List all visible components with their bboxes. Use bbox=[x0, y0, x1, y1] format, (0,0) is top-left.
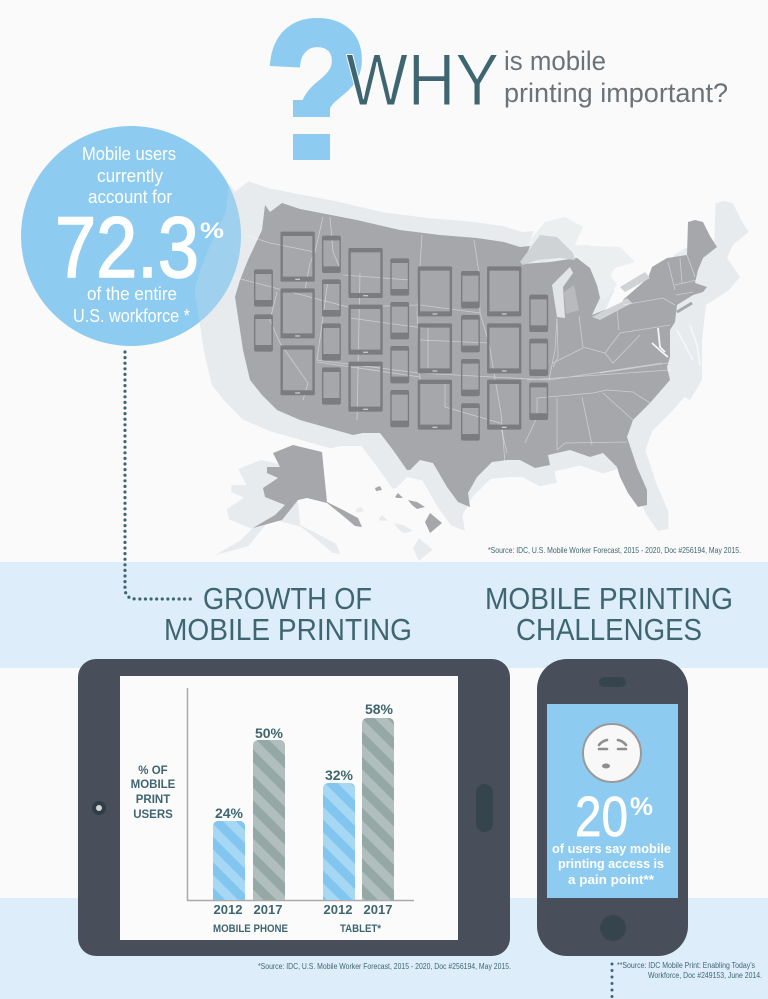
year labels: 2017 bbox=[364, 902, 392, 917]
blue band: section headings bbox=[0, 562, 768, 668]
bar: tablet 2017 bbox=[362, 718, 394, 900]
bar values bbox=[215, 701, 394, 821]
bar values: 50% bbox=[255, 725, 284, 741]
icon: annoyed face bbox=[583, 724, 641, 782]
dotted connector from circle to growth heading bbox=[125, 352, 195, 599]
pain point caption: printing access is bbox=[558, 856, 664, 871]
category labels bbox=[213, 923, 382, 935]
bar values: 32% bbox=[325, 767, 354, 783]
big number: 72.3 bbox=[55, 200, 199, 296]
device column 7 bbox=[461, 271, 480, 441]
subtitle bbox=[504, 46, 728, 108]
map land bbox=[235, 203, 717, 533]
pain point caption bbox=[552, 841, 671, 887]
category labels: TABLET* bbox=[340, 923, 382, 935]
stat text: 72.3%: of the entire bbox=[87, 284, 177, 304]
lake erie bbox=[592, 298, 632, 320]
heading: growth of mobile printing: GROWTH OF bbox=[203, 581, 372, 616]
percent sign: % bbox=[200, 218, 224, 243]
device column 9 bbox=[529, 295, 548, 420]
percent sign: % bbox=[630, 793, 653, 821]
year labels: 2012 bbox=[214, 902, 242, 917]
heading: mobile printing challenges bbox=[485, 581, 733, 647]
heading: mobile printing challenges: MOBILE PRINTING bbox=[485, 581, 733, 616]
state borders bbox=[233, 217, 697, 463]
phone source note bbox=[617, 961, 762, 980]
device column 2 bbox=[280, 232, 315, 395]
y axis label: PRINT bbox=[136, 794, 170, 806]
map halo bbox=[195, 181, 749, 561]
WHY: WHY bbox=[346, 40, 499, 121]
bar values: 58% bbox=[365, 701, 394, 717]
open water gap bbox=[605, 293, 627, 310]
year labels: 2017 bbox=[254, 902, 282, 917]
lake ontario bbox=[620, 272, 650, 292]
tablet home button bbox=[476, 784, 493, 832]
phone screen bbox=[547, 704, 678, 898]
year labels bbox=[214, 902, 392, 917]
phone body bbox=[537, 659, 688, 956]
y axis label: MOBILE bbox=[131, 779, 176, 791]
device column 4 bbox=[348, 248, 383, 412]
map halo showing through the circle bbox=[194, 186, 241, 322]
pain point caption: a pain point** bbox=[568, 872, 655, 887]
category labels: MOBILE PHONE bbox=[213, 923, 288, 935]
map of the United States with device grid bbox=[195, 181, 749, 561]
pain point caption: of users say mobile bbox=[552, 841, 671, 856]
bar: tablet 2012 bbox=[323, 783, 355, 900]
lake superior bbox=[520, 235, 575, 265]
year labels: 2012 bbox=[324, 902, 352, 917]
stat text: 72.3% bbox=[55, 144, 224, 326]
bar: mobile phone 2017 bbox=[253, 740, 285, 900]
subtitle: printing important? bbox=[504, 78, 728, 108]
lake michigan bbox=[552, 267, 573, 318]
device grid bbox=[254, 232, 548, 441]
tablet camera bbox=[92, 801, 106, 815]
stat text: 72.3%: Mobile users bbox=[82, 144, 176, 164]
stat text: 72.3%: U.S. workforce * bbox=[73, 306, 190, 326]
phone home button bbox=[600, 915, 626, 941]
heading: growth of mobile printing: MOBILE PRINTING bbox=[164, 612, 412, 647]
dotted connector at bottom bbox=[610, 964, 614, 999]
east coast halo fill bbox=[660, 255, 740, 400]
y axis label bbox=[131, 765, 176, 821]
y axis label: % OF bbox=[138, 765, 168, 777]
bar values: 24% bbox=[215, 805, 244, 821]
chart axes bbox=[188, 688, 414, 900]
blue band: bottom bbox=[0, 898, 768, 999]
heading: growth of mobile printing bbox=[164, 581, 412, 647]
device column 8 bbox=[487, 266, 521, 430]
device column 6 bbox=[418, 266, 452, 430]
chesapeake inlets bbox=[652, 325, 700, 365]
lower michigan shade bbox=[564, 285, 579, 314]
tablet screen bbox=[120, 676, 458, 940]
tablet device with bar chart bbox=[78, 659, 510, 956]
device column 1 bbox=[254, 269, 273, 352]
title bbox=[266, 0, 728, 198]
tablet source note: *Source: IDC, U.S. Mobile Worker Forecast, 2015 - 2020, Doc #256194, May 2015. bbox=[258, 962, 511, 971]
subtitle: is mobile bbox=[504, 46, 606, 76]
y axis label: USERS bbox=[133, 809, 173, 821]
device column 5 bbox=[390, 258, 409, 427]
tablet body bbox=[78, 659, 510, 956]
bar: mobile phone 2012 bbox=[213, 821, 245, 900]
stat text: 72.3%: account for bbox=[88, 187, 172, 207]
stat text: 72.3%: currently bbox=[97, 166, 163, 186]
phone speaker bbox=[599, 677, 626, 687]
device column 3 bbox=[322, 236, 341, 405]
heading: mobile printing challenges: CHALLENGES bbox=[516, 612, 702, 647]
big 20: 20 bbox=[575, 785, 628, 849]
stat circle background bbox=[21, 126, 241, 346]
light northern lakes bbox=[520, 217, 635, 300]
long island bbox=[677, 303, 692, 312]
smartphone device with statistic bbox=[537, 659, 688, 956]
